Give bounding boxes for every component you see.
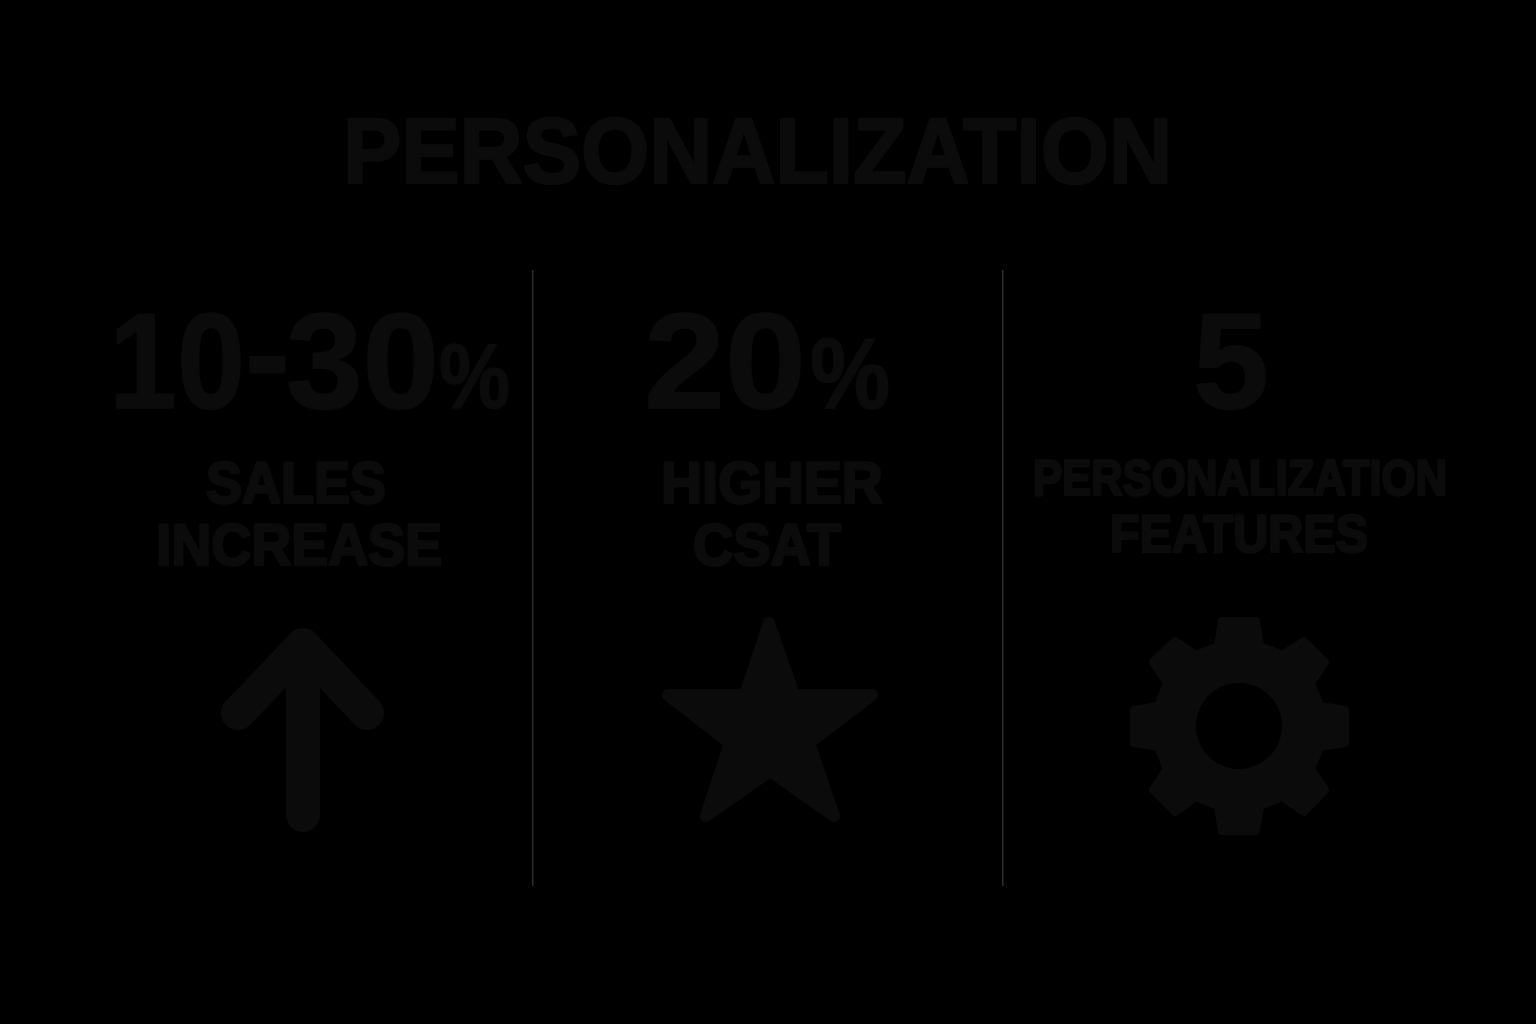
stat: 10-30%: 10 [109, 285, 245, 437]
label: personalization features: PERSONALIZATION [1033, 450, 1447, 506]
stat: 20%: % [810, 318, 890, 430]
label: higher csat [661, 451, 883, 578]
label: personalization features: FEATURES [1110, 505, 1368, 564]
panel: sales increase [109, 277, 510, 815]
icon: star [668, 623, 872, 816]
title: PERSONALIZATION [343, 99, 1172, 203]
label: sales increase [156, 451, 442, 578]
panel: personalization features [1033, 285, 1447, 831]
label: personalization features [1033, 450, 1447, 564]
stat: 10-30%: - [245, 277, 290, 429]
stat: 10-30%: % [439, 326, 510, 428]
column divider right [1002, 270, 1004, 886]
stat: 20% [644, 285, 890, 437]
label: sales increase: INCREASE [156, 513, 442, 578]
stat: 5: 5 [1193, 285, 1269, 437]
label: sales increase: SALES [206, 451, 386, 516]
column divider left [532, 270, 534, 886]
stat: 20%: 20 [644, 285, 806, 437]
icon: up arrow [238, 645, 367, 815]
label: higher csat: CSAT [693, 513, 841, 578]
stat: 10-30%: 30 [286, 285, 439, 437]
label: higher csat: HIGHER [661, 451, 883, 516]
icon: gear [1134, 621, 1345, 831]
stat: 10-30% [109, 277, 510, 437]
panel: higher csat [644, 285, 890, 816]
